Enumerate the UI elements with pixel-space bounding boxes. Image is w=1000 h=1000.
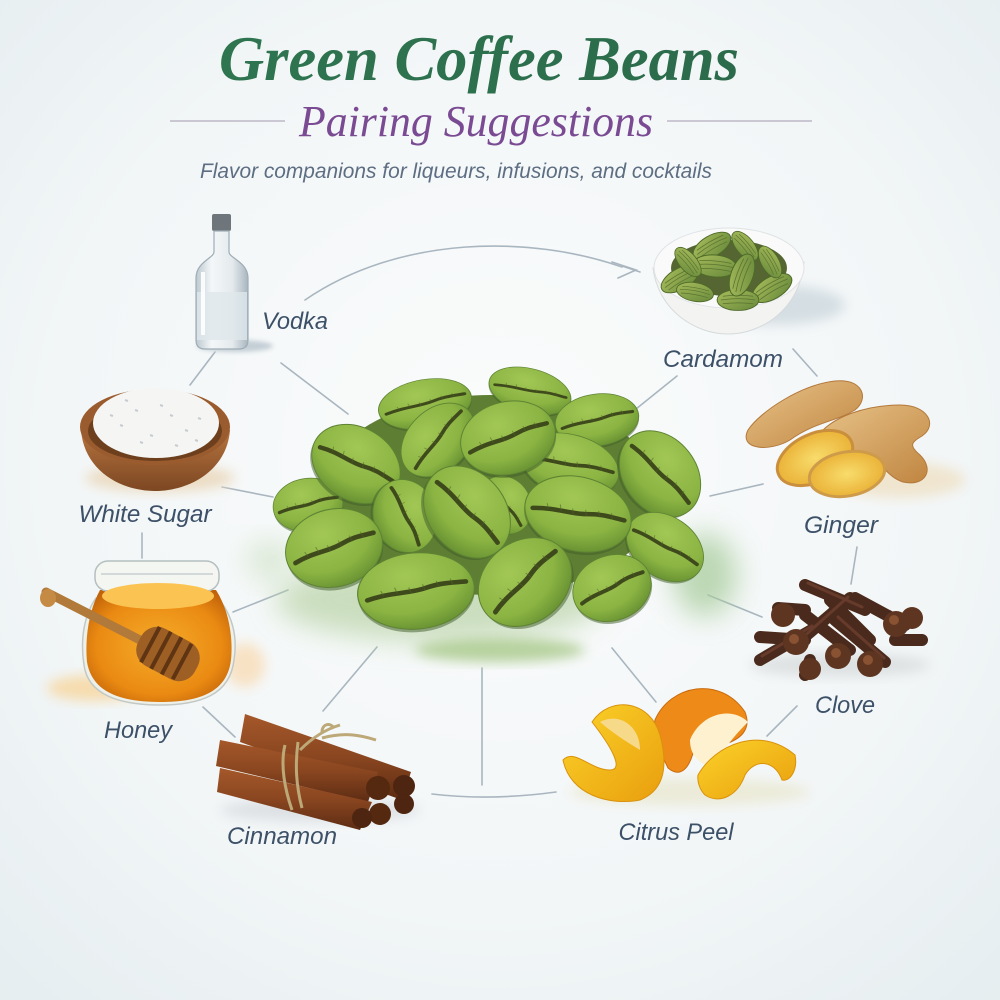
ingredient: cinnamon sticks xyxy=(216,714,420,850)
label: Honey xyxy=(104,717,174,744)
label: Cinnamon xyxy=(227,823,337,850)
label: Ginger xyxy=(804,512,879,539)
ingredient: vodka bottle xyxy=(196,214,328,352)
label: Cardamom xyxy=(663,346,783,373)
tagline: Flavor companions for liqueurs, infusions, and cocktails xyxy=(200,160,712,183)
label: Citrus Peel xyxy=(618,819,734,846)
ingredient: ginger xyxy=(746,381,965,539)
ingredient: clove xyxy=(750,583,930,719)
title: Green Coffee Beans xyxy=(219,23,739,94)
ingredient: cardamom bowl xyxy=(653,227,845,373)
ingredient: white sugar bowl xyxy=(78,388,235,528)
label: Clove xyxy=(815,692,875,719)
watercolor wash xyxy=(246,533,737,662)
title xyxy=(219,23,739,146)
connector lines xyxy=(142,246,857,797)
pile base xyxy=(320,395,660,595)
ingredient: honey jar xyxy=(40,561,265,744)
central green coffee bean pile xyxy=(246,359,737,662)
label: Vodka xyxy=(262,308,328,335)
subtitle: Pairing Suggestions xyxy=(298,97,653,146)
label: White Sugar xyxy=(78,501,213,528)
ingredient: citrus peel xyxy=(563,689,810,846)
